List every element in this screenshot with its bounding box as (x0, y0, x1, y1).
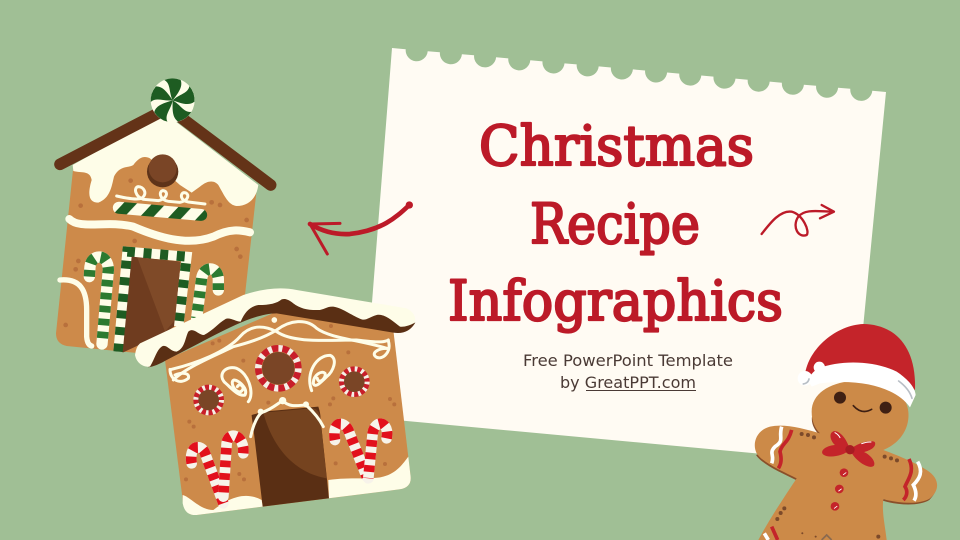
panel: torn paper note (363, 48, 886, 462)
santa hat (798, 324, 916, 407)
title: Recipe (530, 192, 700, 256)
corner icing (60, 280, 92, 346)
buttons (831, 468, 848, 511)
round attic window (147, 154, 178, 187)
illustration: red gingerbread house (135, 288, 415, 515)
roof icing (73, 113, 258, 206)
door (252, 407, 329, 507)
icing belt (69, 219, 250, 241)
body (755, 381, 937, 540)
left peppermint window (196, 387, 221, 413)
icing garland (170, 319, 389, 381)
crumbs (775, 432, 899, 539)
house body (165, 312, 411, 515)
subtitle: Free PowerPoint Template (523, 351, 733, 370)
left candy cane (89, 257, 108, 344)
roof icing (135, 288, 415, 367)
red candy canes (191, 424, 387, 503)
left icing swirl (222, 368, 251, 402)
roof (60, 108, 271, 185)
house body (56, 120, 257, 353)
peppermint candy (149, 78, 196, 123)
title (448, 114, 783, 333)
right peppermint window (342, 369, 367, 394)
door frame (118, 252, 187, 352)
subtitle (523, 351, 733, 392)
door (123, 257, 181, 353)
bottom snow (183, 457, 411, 515)
crumbs (184, 324, 396, 481)
arrow: looping squiggle arrow (762, 205, 834, 236)
subtitle: by GreatPPT.com (560, 373, 696, 392)
door arch icing (251, 397, 323, 437)
arm and leg icing (764, 427, 921, 540)
right icing swirl (310, 355, 334, 391)
illustration: gingerbread man with santa hat (755, 324, 937, 540)
title: Infographics (448, 269, 783, 333)
arrow: left-pointing red arrow (310, 201, 413, 254)
bow tie (822, 431, 875, 467)
large peppermint window (258, 348, 298, 388)
face (834, 392, 892, 414)
crumbs (63, 178, 249, 327)
icing squiggle (117, 187, 205, 204)
roof underside (148, 293, 415, 367)
body shadow (756, 417, 936, 504)
title: Christmas (479, 114, 754, 178)
illustration: green gingerbread house (56, 78, 271, 353)
right candy cane (197, 269, 218, 318)
striped candy bar (112, 201, 208, 221)
